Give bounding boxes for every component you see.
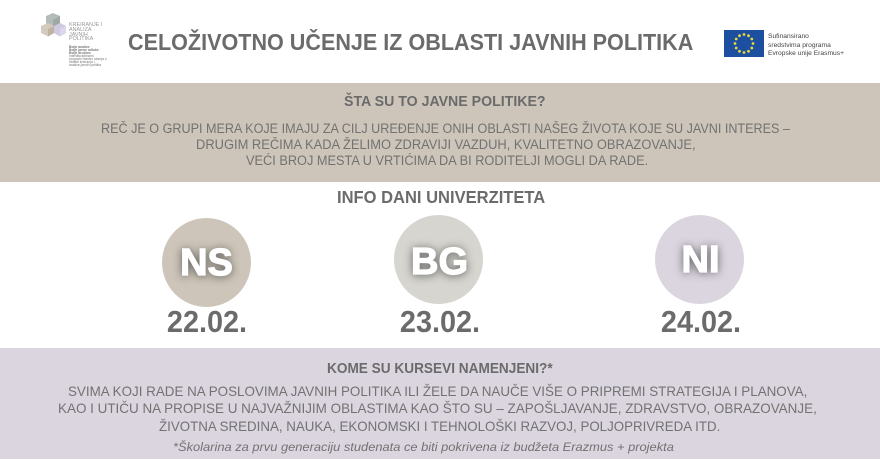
icon: EU flag [724,30,764,57]
logo: Kreiranje i analiza javnih politika [41,13,107,67]
heading: university info days: INFO DANI UNIVERZITETA [337,187,545,207]
circle: BG [394,215,483,304]
EU co-funding badge [724,30,844,57]
footnote: *Školarina za prvu generaciju studenata ce biti pokrivena iz budžeta Erazmus + projekta [173,440,674,454]
circle: NI [655,215,744,304]
panel body text: VEĆI BROJ MESTA U VRTIĆIMA DA BI RODITELJI MOGLI DA RADE. [246,153,648,168]
panel heading: KOME SU KURSEVI NAMENJENI?* [327,361,553,377]
title: CELOŽIVOTNO UČENJE IZ OBLASTI JAVNIH POLITIKA [128,29,693,55]
circle: BG: BG [411,241,468,283]
logo small print [69,45,107,67]
logo small print: oblasti kreiranja i [69,60,94,64]
logo wordmark: ANALIZA [69,27,91,33]
logo wordmark: JAVNIH [69,32,88,38]
circle: NS: NS [180,242,233,284]
logo small print: Bolje društvo [69,51,91,55]
panel: what are public policies [0,83,880,182]
panel body text [101,121,790,168]
circle: NI: NI [682,239,720,281]
panel body text [58,383,817,434]
logo small print: Bolje javne odluke [69,48,99,52]
EU funding text: sredstvima programa [768,42,831,49]
logo wordmark: KREIRANJE I [69,22,102,28]
panel body text: REČ JE O GRUPI MERA KOJE IMAJU ZA CILJ UREĐENJE ONIH OBLASTI NAŠEG ŽIVOTA KOJE SU JAVNI INTERES – [101,121,790,136]
date: NS: 22.02. [167,304,247,339]
circle: NS [162,218,251,307]
date: NI: 24.02. [661,304,741,339]
EU funding text: Sufinansirano [768,33,809,40]
logo small print: Bolje analize [69,45,90,49]
panel: who the courses are for [0,348,880,459]
logo wordmark: POLITIKA [69,36,93,42]
date: BG: 23.02. [400,304,480,339]
EU funding text [768,33,844,57]
EU funding text: Evropske unije Erasmus+ [768,50,844,57]
logo wordmark [69,22,102,42]
panel body text: DRUGIM REČIMA KADA ŽELIMO ZDRAVIJI VAZDUH, KVALITETNO OBRAZOVANJE, [196,137,696,152]
icon: three cubes [41,13,66,36]
panel body text: KAO I UTIČU NA PROPISE U NAJVAŽNIJIM OBLASTIMA KAO ŠTO SU – ZAPOŠLJAVANJE, ZDRAVSTVO, OBRAZOVANJE, [58,400,817,416]
panel body text: ŽIVOTNA SREDINA, NAUKA, EKONOMSKI I TEHNOLOŠKI RAZVOJ, POLJOPRIVREDA ITD. [159,418,720,434]
panel heading: ŠTA SU TO JAVNE POLITIKE? [344,94,546,110]
panel body text: SVIMA KOJI RADE NA POSLOVIMA JAVNIH POLITIKA ILI ŽELE DA NAUČE VIŠE O PRIPREMI STRATEGIJA I PLANOVA, [68,383,807,399]
logo small print: program master učenja o [69,57,107,61]
logo small print: Interdisciplinarni [69,54,94,58]
logo small print: analize javnih politika [69,63,101,67]
